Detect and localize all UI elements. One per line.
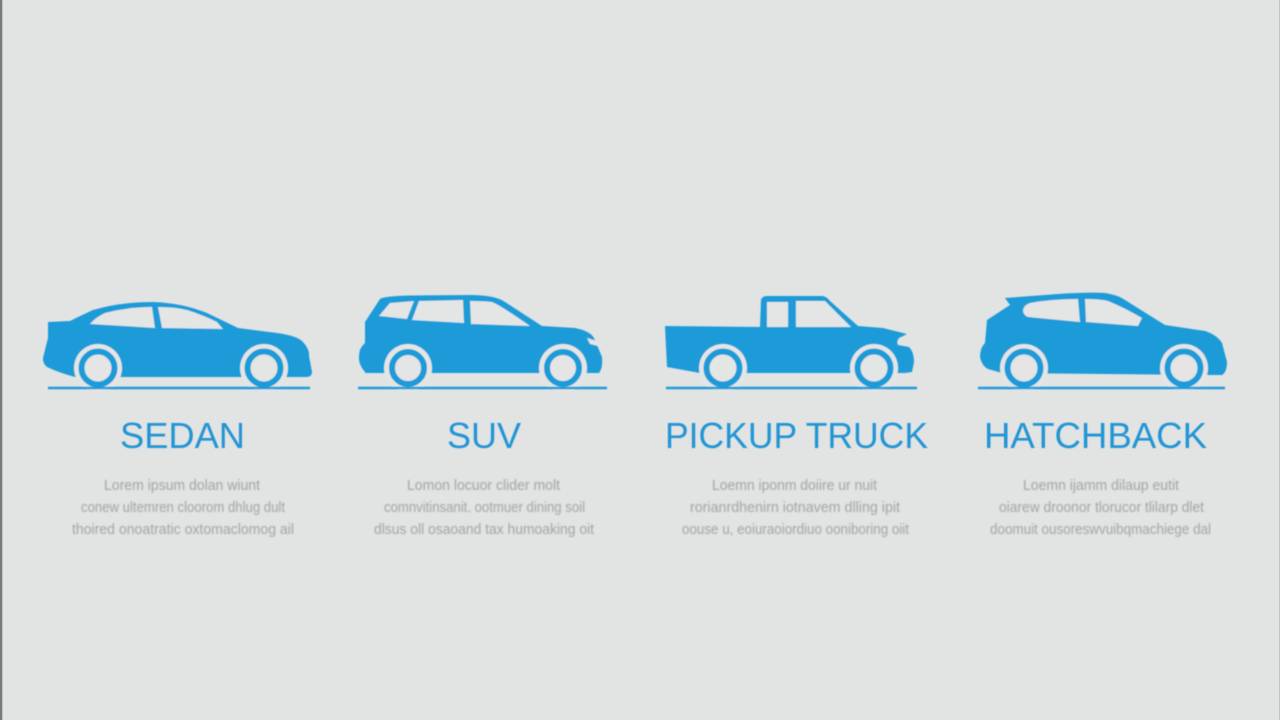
text block: pickup truck description: Loemn iponm doiire ur nuit [712, 477, 878, 494]
text block: suv description [374, 477, 595, 538]
text block: pickup truck description: oouse u, eoiuraoiordiuo ooniboring oiit [682, 521, 910, 538]
text block: hatchback description: doomuit ousoreswvuibqmachiege dal [990, 521, 1211, 538]
text block: pickup truck description [682, 477, 910, 538]
text block: hatchback description [990, 477, 1211, 538]
text block: sedan description: conew ultemren cloorom dhlug dult [81, 499, 286, 516]
heading: suv: SUV [447, 415, 521, 456]
panel: hatchback [978, 293, 1227, 538]
heading: sedan: SEDAN [120, 415, 245, 456]
text block: sedan description: thoired onoatratic oxtomaclomog ail [72, 521, 294, 538]
heading: pickup truck: PICKUP TRUCK [665, 415, 928, 456]
text block: sedan description: Lorem ipsum dolan wiunt [104, 477, 261, 494]
icon: pickup truck [665, 296, 917, 392]
text block: pickup truck description: rorianrdhenirn iotnavem dlling ipit [690, 499, 901, 516]
text block: sedan description [72, 477, 294, 538]
text block: suv description: dlsus oll osaoand tax humoaking oit [374, 521, 595, 538]
heading: hatchback: HATCHBACK [984, 415, 1207, 456]
icon: suv car [358, 295, 607, 392]
text block: hatchback description: Loemn ijamm dilaup eutit [1023, 477, 1180, 494]
icon: hatchback car [978, 293, 1227, 392]
panel: sedan [43, 302, 312, 538]
text block: suv description: comnvitinsanit. ootmuer dining soil [384, 499, 585, 516]
panel: pickup truck [665, 296, 928, 538]
icon: sedan car [43, 302, 312, 392]
text block: suv description: Lomon locuor clider molt [407, 477, 561, 494]
panel: suv [358, 295, 607, 538]
text block: hatchback description: oiarew droonor tlorucor tlilarp dlet [999, 499, 1205, 516]
